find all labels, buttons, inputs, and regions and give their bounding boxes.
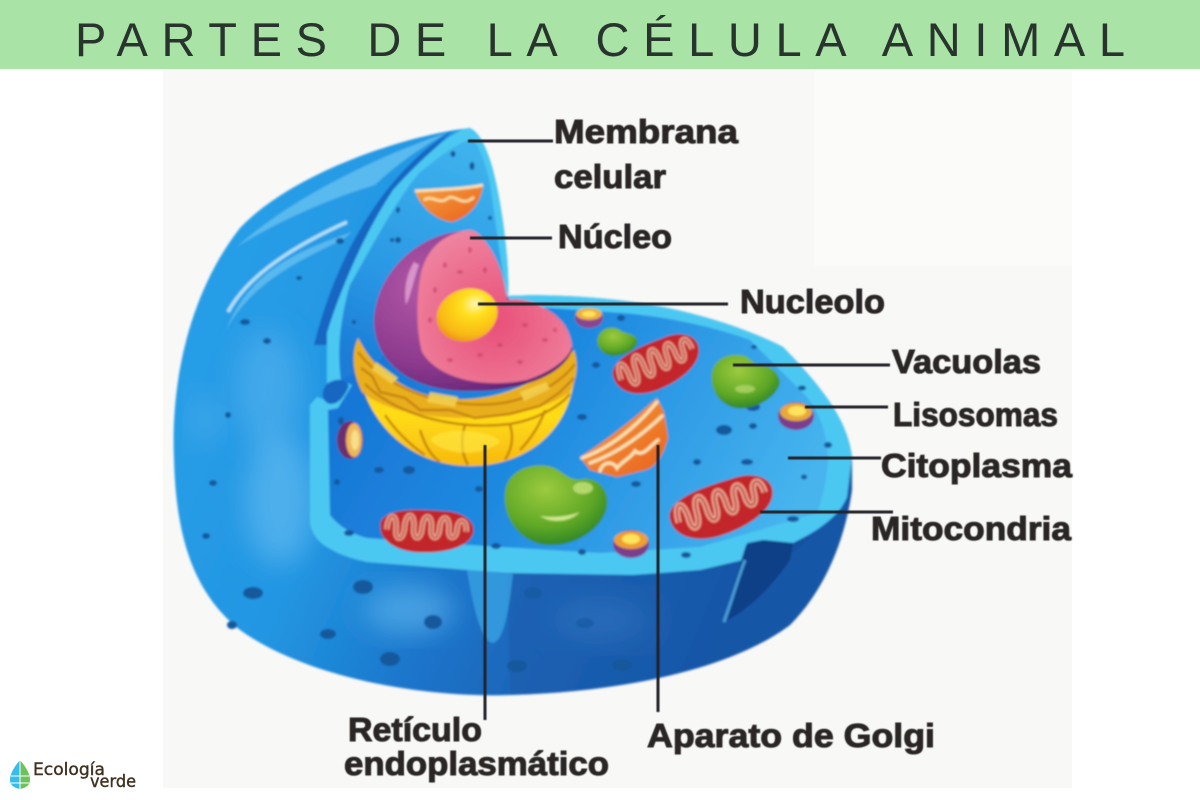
mitochondrion left — [378, 506, 475, 557]
cytoplasm granules — [202, 151, 832, 672]
header band — [0, 0, 1200, 69]
lysosome bottom — [613, 530, 649, 558]
golgi centre — [580, 398, 668, 477]
shell highlights — [191, 133, 650, 642]
mitochondrion top — [607, 327, 708, 403]
vacuole medium — [712, 355, 780, 408]
label: membrana celular: Membrana — [554, 113, 739, 150]
logo wordmark — [33, 760, 136, 792]
cytoplasm wedge surface — [340, 139, 507, 381]
label: retículo endoplasmático: Retículo — [348, 711, 482, 748]
label: membrana celular: celular — [554, 158, 666, 195]
nucleolus — [429, 280, 505, 350]
label: retículo endoplasmático: endoplasmático — [344, 745, 609, 782]
endoplasmic reticulum — [354, 338, 577, 466]
labels — [344, 113, 1073, 782]
lysosome right — [778, 402, 814, 430]
label: membrana celular — [554, 113, 739, 195]
label: vacuolas: Vacuolas — [892, 343, 1041, 380]
label: retículo endoplasmático — [344, 711, 609, 782]
vacuole small — [597, 328, 637, 356]
logo: Ecología verde — [10, 760, 136, 792]
logo wordmark: verde — [90, 772, 136, 792]
label: nucleolo: Nucleolo — [740, 283, 885, 320]
cytoplasm floor surface — [328, 285, 828, 553]
cell outer shell — [174, 128, 852, 695]
mitochondrion right — [664, 469, 781, 548]
dark blob at rim notch — [323, 380, 349, 404]
dark edge band beside wedge — [314, 130, 453, 345]
label: núcleo: Núcleo — [558, 218, 672, 255]
photo background — [163, 69, 1072, 788]
label: citoplasma: Citoplasma — [881, 447, 1073, 484]
cell diagram — [174, 128, 852, 695]
golgi top — [415, 184, 483, 222]
icon: leaf — [10, 760, 30, 789]
bottom right dark shell — [507, 470, 852, 695]
logo wordmark: Ecología — [33, 760, 105, 780]
label: mitocondria: Mitocondria — [871, 510, 1072, 547]
lysosome left — [337, 421, 363, 459]
vacuole large — [505, 465, 607, 545]
title: PARTES DE LA CÉLULA ANIMAL — [75, 13, 1125, 66]
label: aparato de golgi: Aparato de Golgi — [647, 717, 935, 754]
groove, lower left notch — [467, 570, 513, 643]
nucleus — [374, 230, 573, 391]
lysosome top — [575, 308, 603, 328]
groove, lower right notch — [724, 540, 793, 622]
leader lines — [468, 141, 893, 720]
cut surface rim — [310, 128, 852, 575]
label: lisosomas: Lisosomas — [893, 396, 1058, 433]
